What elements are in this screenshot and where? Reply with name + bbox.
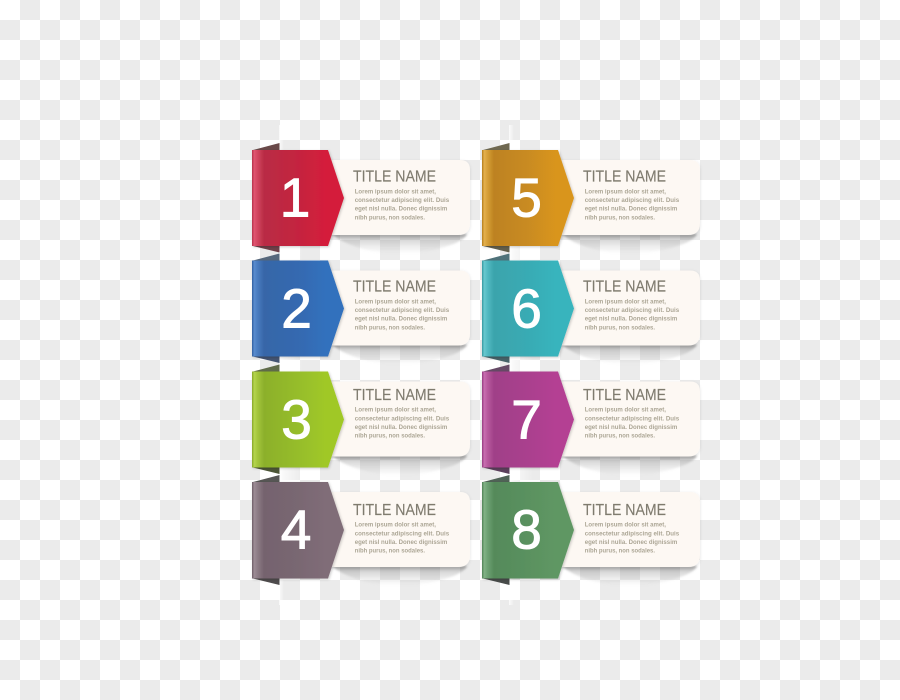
item 6: 6: [511, 277, 542, 339]
item 1: nibh purus, non sodales.: [355, 214, 425, 221]
item 6: nibh purus, non sodales.: [585, 324, 655, 331]
item 5: [482, 143, 700, 254]
item 4: eget nisl nulla. Donec dignissim: [355, 539, 447, 546]
item 3: [252, 364, 470, 476]
item 3: 3: [281, 388, 312, 450]
item 2: [252, 254, 470, 364]
item 8: consectetur adipiscing elit. Duis: [585, 530, 679, 537]
item 1: TITLE NAME: [353, 169, 436, 186]
item 1: Lorem ipsum dolor sit amet,: [355, 188, 436, 195]
item 7: nibh purus, non sodales.: [585, 433, 655, 440]
item 4: consectetur adipiscing elit. Duis: [355, 530, 449, 537]
item 7: eget nisl nulla. Donec dignissim: [585, 424, 677, 431]
item 1: eget nisl nulla. Donec dignissim: [355, 206, 447, 213]
item 8: [482, 475, 700, 586]
item 2: 2: [281, 277, 312, 339]
item 6: consectetur adipiscing elit. Duis: [585, 307, 679, 314]
item 1: 1: [280, 167, 310, 229]
item 5: TITLE NAME: [583, 169, 666, 186]
item 4: Lorem ipsum dolor sit amet,: [355, 522, 436, 529]
item 8: TITLE NAME: [583, 502, 666, 519]
left column spine glow: [279, 125, 303, 605]
item 4: TITLE NAME: [353, 502, 436, 519]
item 8: 8: [511, 498, 542, 560]
item 8: eget nisl nulla. Donec dignissim: [585, 539, 677, 546]
item 1: [252, 143, 470, 254]
item 3: consectetur adipiscing elit. Duis: [355, 415, 449, 422]
item 5: 5: [511, 167, 542, 229]
right column spine glow: [509, 125, 533, 605]
item 2: nibh purus, non sodales.: [355, 324, 425, 331]
item 1: consectetur adipiscing elit. Duis: [355, 197, 449, 204]
item 4: nibh purus, non sodales.: [355, 548, 425, 555]
item 3: Lorem ipsum dolor sit amet,: [355, 407, 436, 414]
item 3: TITLE NAME: [353, 387, 436, 404]
item 6: Lorem ipsum dolor sit amet,: [585, 298, 666, 305]
item 5: eget nisl nulla. Donec dignissim: [585, 206, 677, 213]
item 7: Lorem ipsum dolor sit amet,: [585, 407, 666, 414]
item 7: TITLE NAME: [583, 387, 666, 404]
item 8: nibh purus, non sodales.: [585, 548, 655, 555]
item 2: eget nisl nulla. Donec dignissim: [355, 316, 447, 323]
item 7: 7: [511, 388, 542, 450]
item 6: TITLE NAME: [583, 279, 666, 296]
item 4: 4: [281, 498, 311, 560]
item 5: Lorem ipsum dolor sit amet,: [585, 188, 666, 195]
item 5: nibh purus, non sodales.: [585, 214, 655, 221]
item 2: consectetur adipiscing elit. Duis: [355, 307, 449, 314]
item 6: eget nisl nulla. Donec dignissim: [585, 316, 677, 323]
item 6: [482, 254, 700, 364]
item 8: Lorem ipsum dolor sit amet,: [585, 522, 666, 529]
item 7: [482, 364, 700, 476]
item 3: eget nisl nulla. Donec dignissim: [355, 424, 447, 431]
item 4: [252, 475, 470, 586]
item 5: consectetur adipiscing elit. Duis: [585, 197, 679, 204]
item 2: TITLE NAME: [353, 279, 436, 296]
item 3: nibh purus, non sodales.: [355, 433, 425, 440]
item 7: consectetur adipiscing elit. Duis: [585, 415, 679, 422]
item 2: Lorem ipsum dolor sit amet,: [355, 298, 436, 305]
